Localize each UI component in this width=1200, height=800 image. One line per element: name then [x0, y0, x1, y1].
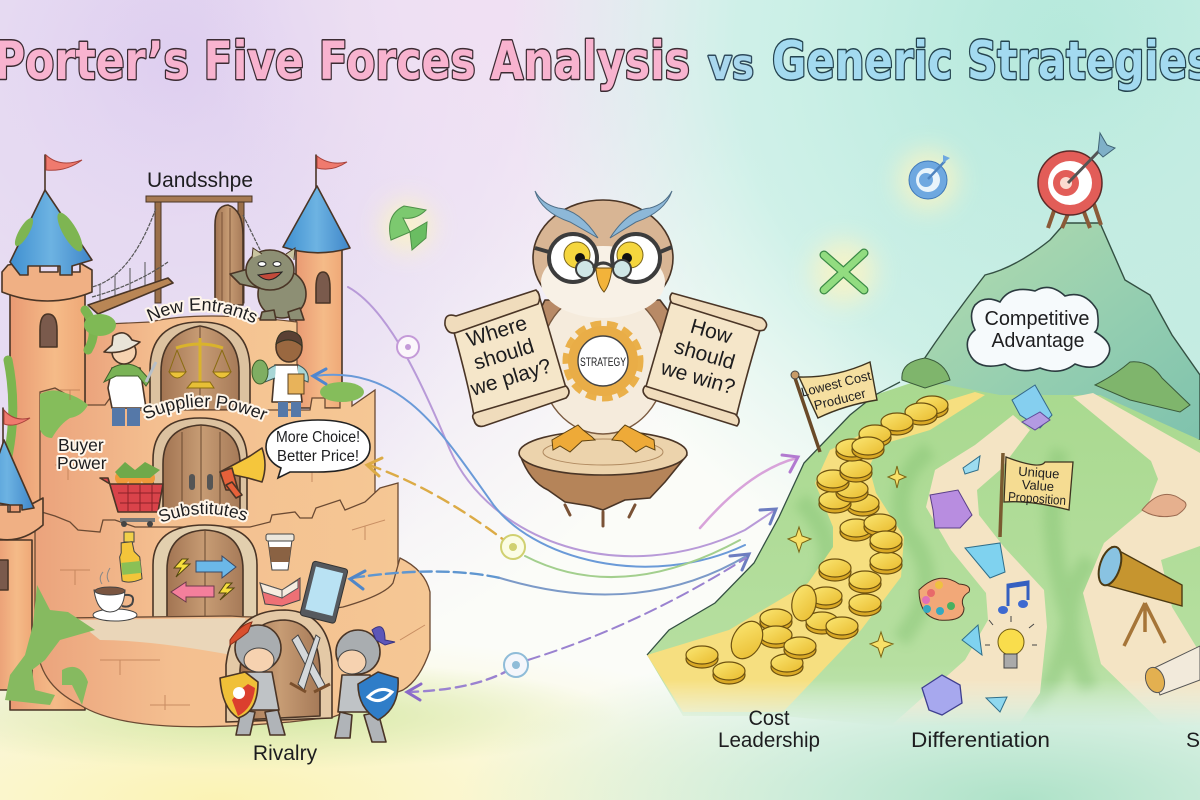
target on peak [1038, 133, 1115, 228]
label: cost leadership: Cost [748, 707, 790, 730]
tier 3 wall [35, 483, 398, 640]
label: Buyer Power: Buyer [58, 435, 104, 455]
bushes [902, 358, 1190, 412]
strategy labels [718, 707, 1200, 752]
owl head [533, 200, 673, 318]
right path [1073, 393, 1200, 730]
competitive advantage cloud: Advantage [992, 330, 1084, 352]
scroll: how should we win: How [688, 315, 735, 349]
tier 2 door [153, 418, 247, 510]
paint palette [919, 578, 970, 620]
gem: large diamond [922, 675, 962, 715]
label: differentiation: Differentiation [911, 729, 1050, 752]
upper peak [920, 223, 1200, 440]
scroll: how should we win [643, 293, 767, 426]
owl illustration [445, 191, 767, 526]
title: Porter’s Five Forces Analysis [0, 31, 690, 92]
speech bubble: More Choice! [276, 429, 360, 446]
knight left [220, 622, 285, 735]
right tower [283, 155, 350, 408]
tier 3 door with swapping arrows [153, 525, 257, 620]
owl brows [535, 191, 672, 238]
gem: small shard [963, 456, 980, 474]
label: cost leadership [718, 707, 820, 752]
gem: triangle [962, 625, 982, 655]
drawbridge gate and rope bridge [88, 196, 265, 314]
curled map on path [1142, 494, 1186, 517]
gems and differentiation icons [919, 385, 1073, 715]
scroll: where should we play: Where [464, 312, 530, 352]
label: Supplier Power: Supplier Power [141, 392, 270, 422]
icon: green recycle leaves [381, 200, 433, 252]
platform [519, 431, 687, 526]
arrow: blue supplier [313, 369, 745, 567]
telescope [1094, 544, 1182, 646]
banner: unique value proposition: Value [1021, 477, 1055, 494]
troll: new entrants [230, 248, 306, 320]
scroll: where should we play: should [471, 335, 537, 375]
arrows between forces and strategies [313, 287, 798, 700]
label: cost leadership: Leadership [718, 729, 820, 752]
bottom tier base [35, 558, 430, 727]
merchant left: supplier [104, 333, 156, 426]
scroll: how should we win: should [672, 335, 737, 374]
mountain [647, 223, 1200, 735]
lower hill [647, 380, 1200, 735]
title: vs [708, 40, 754, 89]
gold path [647, 392, 985, 712]
bottom door [226, 610, 332, 722]
gem: top crystal [1012, 385, 1052, 430]
hill outline [647, 382, 900, 655]
hill, paths and shading, faded at the foot [647, 380, 1200, 735]
tier 1 door with scales [150, 322, 250, 410]
label: Rivalry: Rivalry [253, 742, 318, 765]
gem: blue shard [965, 543, 1005, 578]
arrow: blue dashed substitutes [350, 554, 749, 594]
tier 2 wall [40, 388, 375, 545]
far left tower [0, 408, 43, 690]
note heads [998, 600, 1028, 614]
label: Buyer Power: Power [57, 453, 107, 473]
tier 1 wall [85, 316, 297, 420]
banner: lowest cost producer: Producer [812, 385, 868, 413]
banner: lowest cost producer: Lowest Cost [799, 368, 873, 400]
merchant right: supplier [252, 331, 308, 417]
speech bubble [266, 420, 370, 478]
label: focus (cropped): S [1186, 729, 1200, 752]
icon: book [260, 578, 300, 606]
icon: small blue target [898, 150, 958, 210]
bricks [55, 390, 425, 710]
icon: coffee cup [93, 568, 137, 621]
castle illustration [0, 154, 431, 765]
megaphone [220, 448, 265, 498]
gear badge [571, 329, 635, 393]
light bulb [985, 616, 1037, 668]
competitive advantage cloud: Competitive [984, 308, 1090, 330]
speech bubble: Better Price! [277, 448, 359, 465]
owl wings and body [535, 290, 675, 434]
label: Substitutes: Substitutes [157, 499, 249, 524]
gear badge: STRATEGY [580, 355, 626, 369]
banner: unique value proposition [1000, 453, 1073, 537]
arrow: yellow dashed buyer [367, 458, 740, 577]
scroll: how should we win: we win? [657, 356, 738, 399]
arrow: pink to cost path [700, 455, 798, 528]
scroll: where should we play [445, 290, 569, 426]
crossed swords [290, 635, 330, 692]
label: New Entrants: New Entrants [144, 296, 258, 324]
banner: lowest cost producer [791, 362, 877, 452]
left tower [2, 155, 116, 710]
gem: bottom shard [986, 697, 1007, 712]
scroll: where should we play: we play? [467, 354, 554, 401]
tier 2 moss [40, 382, 364, 438]
arrow: purple new entrants [348, 287, 776, 556]
telescope and spyglass [1094, 494, 1200, 695]
differentiation path [900, 415, 1047, 718]
banner: unique value proposition: Unique [1018, 464, 1060, 481]
music notes [1008, 582, 1028, 606]
icon: juice bottle [118, 532, 142, 583]
owl feet [552, 425, 655, 452]
shopping cart: buyer power [100, 462, 163, 527]
arrow: purple dashed rivalry [407, 558, 746, 700]
icon: green cross [812, 240, 876, 304]
rolled map [1142, 646, 1200, 695]
gem: purple [930, 490, 972, 528]
stone terrace [75, 618, 246, 655]
hill shading [790, 450, 1090, 710]
label: Landscape: Uandsshpe [147, 169, 253, 192]
icon: takeaway cup [266, 534, 294, 570]
gold coins: cost leadership [686, 396, 948, 684]
competitive advantage cloud [967, 287, 1110, 371]
icon: tablet [300, 561, 348, 624]
moss on base [5, 585, 95, 705]
banner: unique value proposition: Proposition [1008, 489, 1067, 508]
knight right [335, 627, 398, 742]
